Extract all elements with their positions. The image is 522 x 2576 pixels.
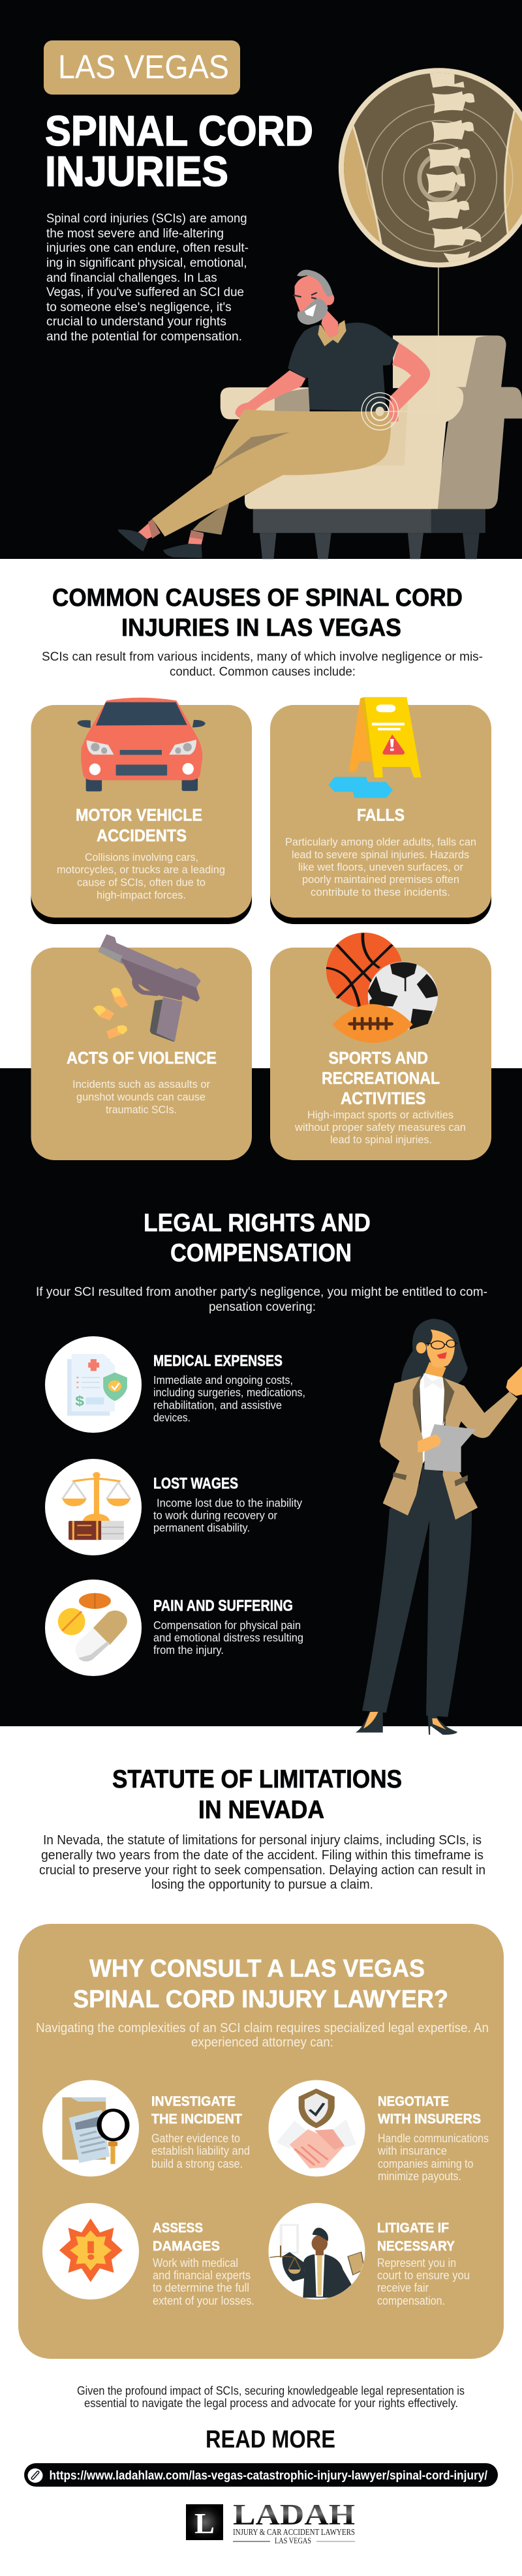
icon: car	[77, 698, 206, 792]
item text: and emotional distress resulting	[153, 1631, 303, 1644]
spine magnifier circle	[333, 68, 522, 267]
item heading: THE INCIDENT	[151, 2111, 242, 2127]
item: litigate if necessary	[269, 2203, 470, 2307]
title: SPINAL CORD	[45, 107, 313, 155]
text block: introduction: and financial challenges. In Las	[46, 271, 217, 285]
text block: introduction: and the potential for compensation.	[46, 330, 242, 344]
card heading: ACCIDENTS	[97, 826, 187, 845]
heading: read more: READ MORE	[206, 2426, 335, 2453]
item text: from the injury.	[153, 1643, 224, 1656]
panel heading: SPINAL CORD INJURY LAWYER?	[73, 1986, 448, 2013]
card text: Incidents such as assaults or	[72, 1078, 210, 1090]
icon: pain target	[361, 393, 398, 430]
item heading: NEGOTIATE	[378, 2093, 449, 2109]
item text: Compensation for physical pain	[153, 1619, 301, 1632]
item heading: DAMAGES	[153, 2238, 220, 2254]
armchair	[221, 335, 522, 559]
item text: with insurance	[377, 2144, 447, 2157]
heading: legal rights	[144, 1209, 371, 1267]
panel: why consult a lawyer	[18, 1924, 504, 2359]
item text: receive fair	[377, 2281, 429, 2294]
card text	[57, 851, 225, 901]
card heading: ACTS OF VIOLENCE	[67, 1048, 217, 1068]
heading: statute of limitations: STATUTE OF LIMITATIONS	[112, 1765, 402, 1793]
text block: causes intro	[42, 650, 483, 679]
item text: Immediate and ongoing costs,	[153, 1373, 293, 1386]
card heading: FALLS	[357, 805, 405, 824]
text block: conclusion: Given the profound impact of SCIs, securing knowledgeable legal representation is	[77, 2384, 465, 2397]
card text: without proper safety measures can	[294, 1121, 466, 1133]
heading: statute of limitations	[112, 1765, 402, 1824]
card text: motorcycles, or trucks are a leading	[57, 863, 225, 876]
text block: introduction: Spinal cord injuries (SCIs) are among	[46, 212, 247, 226]
item heading: ASSESS	[153, 2220, 203, 2236]
icon: sports balls	[326, 933, 438, 1043]
panel heading: WHY CONSULT A LAS VEGAS	[89, 1955, 425, 1983]
panel: falls	[270, 697, 491, 924]
icon: pills	[45, 1580, 142, 1676]
item text: Gather evidence to	[151, 2132, 240, 2145]
item text	[377, 2256, 470, 2307]
heading: statute of limitations: IN NEVADA	[198, 1796, 324, 1824]
panel: hero background	[0, 0, 522, 559]
title	[45, 107, 313, 195]
logo: Ladah	[186, 2498, 355, 2545]
card text: like wet floors, uneven surfaces, or	[298, 861, 463, 873]
item text	[377, 2132, 489, 2183]
text block: causes intro: SCIs can result from various incidents, many of which involve negligence or mis-	[42, 650, 483, 664]
illustration: lawyer woman	[356, 1319, 522, 1735]
item text: rehabilitation, and assistive	[153, 1398, 282, 1411]
heading: legal rights: COMPENSATION	[170, 1239, 352, 1267]
item text	[153, 1496, 302, 1534]
panel: legal rights background	[0, 1068, 522, 1726]
text block: introduction: injuries one can endure, often result-	[46, 241, 249, 255]
callout line	[380, 267, 438, 412]
card heading: RECREATIONAL	[322, 1068, 440, 1088]
item text	[153, 2256, 254, 2307]
item heading: WITH INSURERS	[378, 2111, 481, 2127]
text block: introduction: to someone else's negligence, it's	[46, 301, 232, 314]
panel: motor vehicle accidents	[31, 698, 252, 924]
text block: statute: generally two years from the date of the accident. Filing within this timeframe is	[41, 1848, 484, 1863]
badge: Las Vegas: LAS VEGAS	[58, 48, 229, 85]
text block: introduction: Vegas, if you've suffered an SCI due	[46, 286, 244, 299]
card heading: MOTOR VEHICLE	[76, 805, 202, 824]
item: pain and suffering	[45, 1580, 303, 1676]
logo: Ladah: LADAH	[233, 2498, 355, 2531]
man	[118, 270, 430, 558]
item text: extent of your losses.	[153, 2294, 254, 2307]
item heading: INVESTIGATE	[151, 2093, 236, 2109]
item text: Work with medical	[153, 2256, 238, 2269]
heading: legal rights: LEGAL RIGHTS AND	[144, 1209, 371, 1237]
icon: medical bill	[45, 1336, 142, 1433]
panel intro text	[36, 2020, 489, 2050]
text block: statute: losing the opportunity to pursue a claim.	[151, 1877, 373, 1892]
card text: cause of SCIs, often due to	[77, 876, 206, 888]
item text	[151, 2132, 250, 2170]
icon: warning burst	[42, 2203, 139, 2299]
icon: link	[27, 2468, 43, 2483]
item text: to determine the full	[153, 2281, 249, 2294]
heading: common causes: INJURIES IN LAS VEGAS	[121, 614, 401, 642]
card heading: ACTIVITIES	[341, 1088, 425, 1108]
panel: sports and recreational activities	[270, 933, 491, 1160]
card text: traumatic SCIs.	[106, 1103, 177, 1116]
text block: causes intro: conduct. Common causes include:	[170, 665, 356, 679]
item heading	[377, 2220, 455, 2254]
item: investigate the incident	[42, 2080, 250, 2177]
icon: folder and magnifier	[42, 2080, 139, 2177]
item heading: LITIGATE IF	[377, 2220, 449, 2236]
card text: contribute to these incidents.	[311, 886, 450, 899]
item text: and financial experts	[153, 2269, 251, 2282]
item text: build a strong case.	[151, 2157, 243, 2170]
logo: Ladah: L	[194, 2508, 215, 2539]
text block: statute: In Nevada, the statute of limitations for personal injury claims, including SCIs, is	[43, 1833, 482, 1848]
card heading: SPORTS AND	[329, 1048, 428, 1068]
card text: lead to spinal injuries.	[330, 1133, 432, 1146]
text block: conclusion: essential to navigate the legal process and advocate for your rights effectively.	[84, 2397, 458, 2410]
item text: permanent disability.	[153, 1521, 250, 1534]
text block: statute: crucial to preserve your right to seek compensation. Delaying action can result in	[39, 1863, 485, 1878]
text block: legal intro	[36, 1285, 487, 1314]
icon: medical bill: $	[75, 1393, 84, 1409]
card text	[285, 836, 476, 899]
item heading	[378, 2093, 481, 2127]
text block: introduction: ing in significant physical, emotional,	[46, 256, 247, 270]
item: medical expenses	[45, 1336, 305, 1433]
icon: wet floor sign	[329, 697, 421, 798]
icon: shield and handshake	[269, 2080, 365, 2177]
item text: to work during recovery or	[153, 1509, 277, 1522]
item text: establish liability and	[151, 2144, 250, 2157]
item: lost wages	[45, 1459, 302, 1555]
card text: high-impact forces.	[97, 889, 186, 901]
logo: Ladah: INJURY & CAR ACCIDENT LAWYERS	[233, 2528, 355, 2538]
item text: devices.	[153, 1411, 191, 1424]
item text: Represent you in	[377, 2256, 456, 2269]
text block: introduction: the most severe and life-altering	[46, 227, 224, 241]
panel: acts of violence	[31, 934, 252, 1160]
item heading: MEDICAL EXPENSES	[153, 1353, 283, 1370]
item text: minimize payouts.	[378, 2170, 461, 2183]
item heading: LOST WAGES	[153, 1475, 238, 1492]
text block: introduction: crucial to understand your rights	[46, 315, 226, 329]
item text: Handle communications	[378, 2132, 489, 2145]
text block: legal intro: pensation covering:	[209, 1300, 316, 1314]
icon: handgun and bullets	[93, 934, 201, 1041]
item heading: NECESSARY	[377, 2238, 455, 2254]
card text: Particularly among older adults, falls can	[285, 836, 476, 848]
text block: conclusion	[77, 2384, 465, 2410]
item text: Income lost due to the inability	[157, 1496, 302, 1509]
title: INJURIES	[45, 147, 228, 195]
link url: https://www.ladahlaw.com/las-vegas-catastrophic-injury-lawyer/spinal-cord-injury/	[50, 2469, 488, 2483]
illustration: man in armchair with spine callout	[118, 68, 522, 559]
icon: male lawyer	[269, 2203, 365, 2299]
text block: introduction	[46, 212, 249, 344]
card heading	[322, 1048, 440, 1108]
panel intro text: Navigating the complexities of an SCI claim requires specialized legal expertise. An	[36, 2020, 489, 2035]
panel heading	[73, 1955, 448, 2013]
logo: Ladah: LAS VEGAS	[275, 2536, 311, 2545]
item heading	[153, 2220, 220, 2254]
badge: Las Vegas	[44, 40, 240, 95]
panel intro text: experienced attorney can:	[191, 2035, 333, 2050]
card text: poorly maintained premises often	[302, 873, 459, 886]
card text: High-impact sports or activities	[307, 1109, 453, 1121]
card heading	[76, 805, 202, 845]
item: negotiate with insurers	[269, 2080, 489, 2183]
card text	[72, 1078, 210, 1116]
item heading: PAIN AND SUFFERING	[153, 1597, 293, 1615]
item text: companies aiming to	[378, 2157, 474, 2170]
item heading	[151, 2093, 242, 2127]
card text: Collisions involving cars,	[85, 851, 198, 863]
card text: gunshot wounds can cause	[76, 1090, 206, 1103]
card text	[294, 1109, 466, 1146]
text block: legal intro: If your SCI resulted from another party's negligence, you might be entitled to com-	[36, 1285, 487, 1299]
item text: compensation.	[377, 2294, 445, 2307]
item text	[153, 1373, 305, 1424]
item text	[153, 1619, 303, 1656]
item: assess damages	[42, 2203, 254, 2307]
link pill	[24, 2463, 498, 2487]
item text: including surgeries, medications,	[153, 1386, 305, 1399]
heading: common causes	[52, 584, 463, 642]
card text: lead to severe spinal injuries. Hazards	[292, 848, 469, 861]
item text: court to ensure you	[377, 2269, 470, 2282]
text block: statute	[39, 1833, 485, 1892]
heading: common causes: COMMON CAUSES OF SPINAL CORD	[52, 584, 463, 612]
icon: scales and books	[45, 1459, 142, 1555]
